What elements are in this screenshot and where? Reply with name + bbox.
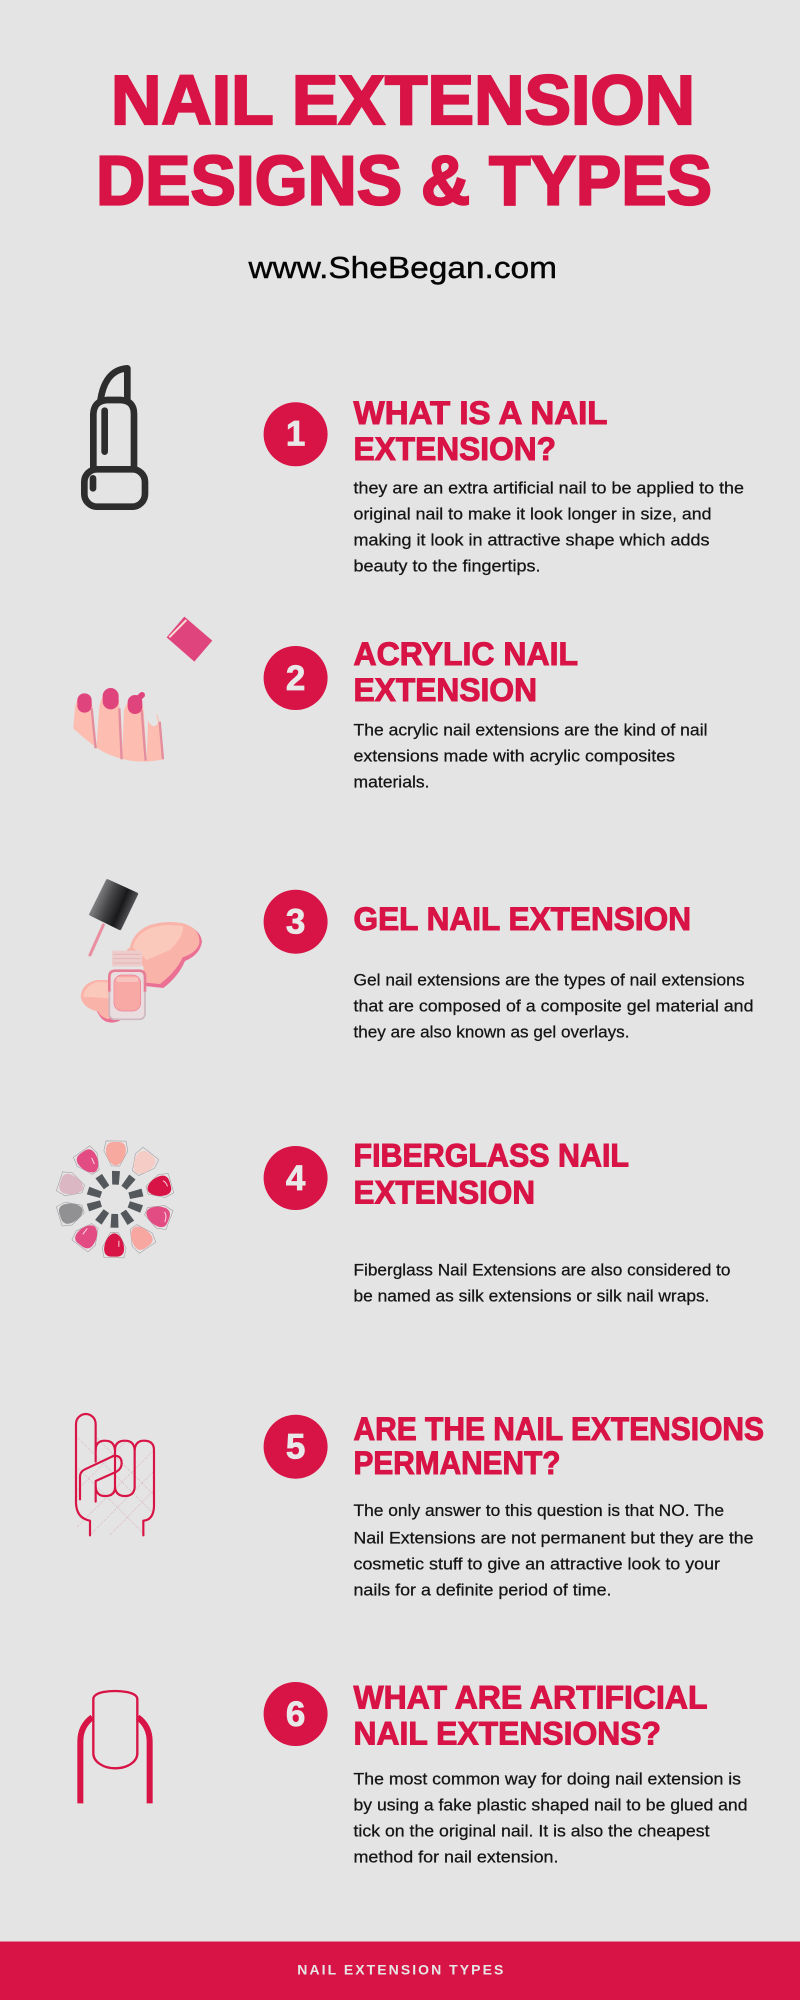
heading 1: [354, 395, 608, 467]
body text 6: by using a fake plastic shaped nail to be glued and: [354, 1796, 748, 1814]
number badge 6: 6: [286, 1695, 305, 1734]
heading 4: FIBERGLASS NAIL: [354, 1138, 629, 1174]
body text 2: [354, 721, 708, 791]
number badge 2: 2: [286, 659, 305, 698]
body text 6: The most common way for doing nail extension is: [354, 1770, 741, 1788]
heading 2: EXTENSION: [354, 672, 537, 708]
heading 1: EXTENSION?: [354, 431, 556, 467]
panel: acrylic nail extension: [73, 617, 707, 791]
number badge 6: [264, 1682, 328, 1746]
heading 4: EXTENSION: [354, 1174, 535, 1210]
icon: lipstick: [84, 368, 145, 507]
body text 1: original nail to make it look longer in size, and: [354, 505, 712, 523]
body text 1: beauty to the fingertips.: [354, 557, 540, 575]
heading 6: [354, 1680, 708, 1752]
heading 5: ARE THE NAIL EXTENSIONS: [354, 1411, 764, 1447]
panel: gel nail extension: [81, 881, 754, 1041]
body text 3: Gel nail extensions are the types of nail extensions: [354, 971, 744, 989]
heading 2: ACRYLIC NAIL: [354, 636, 578, 672]
icon: painted nails and polish swatch: [73, 617, 212, 762]
icon: pointing hand outline: [76, 1414, 154, 1535]
body text 5: [354, 1502, 754, 1599]
number badge 2: [264, 646, 328, 710]
body text 6: [354, 1770, 748, 1866]
number badge 5: 5: [286, 1428, 305, 1466]
number badge 1: 1: [286, 414, 305, 454]
heading 5: PERMANENT?: [354, 1445, 560, 1481]
body text 6: tick on the original nail. It is also the cheapest: [354, 1822, 710, 1840]
body text 1: they are an extra artificial nail to be applied to the: [354, 479, 744, 497]
heading 3: GEL NAIL EXTENSION: [354, 901, 691, 937]
heading 1: WHAT IS A NAIL: [354, 395, 608, 431]
panel: what are artificial nail extensions: [80, 1680, 748, 1866]
number badge 4: 4: [286, 1159, 306, 1198]
heading 2: [354, 636, 578, 708]
body text 1: [354, 479, 744, 575]
body text 2: extensions made with acrylic composites: [354, 747, 675, 765]
heading 6: NAIL EXTENSIONS?: [354, 1716, 661, 1752]
body text 5: cosmetic stuff to give an attractive look to your: [354, 1555, 721, 1573]
body text 2: materials.: [354, 773, 430, 791]
body text 4: [354, 1261, 730, 1305]
body text 6: method for nail extension.: [354, 1848, 558, 1866]
title: DESIGNS & TYPES: [96, 142, 712, 220]
icon: nail polish bottle and spill: [81, 881, 202, 1023]
footer band: NAIL EXTENSION TYPES: [297, 1961, 503, 1977]
number badge 4: [264, 1146, 328, 1210]
number badge 3: [264, 890, 328, 954]
heading 6: WHAT ARE ARTIFICIAL: [354, 1680, 708, 1716]
panel: what is a nail extension: [84, 368, 744, 575]
body text 3: that are composed of a composite gel material and: [354, 997, 754, 1015]
title: NAIL EXTENSION: [111, 61, 695, 139]
footer band: [0, 1942, 800, 2000]
panel: are the nail extensions permanent: [76, 1411, 764, 1599]
number badge 3: 3: [286, 902, 305, 942]
body text 3: they are also known as gel overlays.: [354, 1023, 630, 1041]
body text 5: Nail Extensions are not permanent but they are the: [354, 1529, 754, 1547]
body text 5: The only answer to this question is that NO. The: [354, 1502, 724, 1520]
body text 4: Fiberglass Nail Extensions are also considered to: [354, 1261, 730, 1279]
website url: www.SheBegan.com: [247, 250, 557, 285]
body text 3: [354, 971, 754, 1041]
body text 2: The acrylic nail extensions are the kind of nail: [354, 721, 708, 739]
heading 4: [354, 1138, 629, 1210]
body text 1: making it look in attractive shape which adds: [354, 531, 710, 549]
body text 5: nails for a definite period of time.: [354, 1581, 612, 1599]
icon: wheel of nail tips: [56, 1141, 174, 1258]
number badge 1: [264, 402, 328, 466]
title: [96, 61, 712, 220]
heading 5: [354, 1411, 764, 1481]
number badge 5: [264, 1415, 328, 1479]
body text 4: be named as silk extensions or silk nail wraps.: [354, 1287, 710, 1305]
icon: fingertip with nail: [80, 1691, 150, 1803]
panel: fiberglass nail extension: [56, 1138, 731, 1305]
